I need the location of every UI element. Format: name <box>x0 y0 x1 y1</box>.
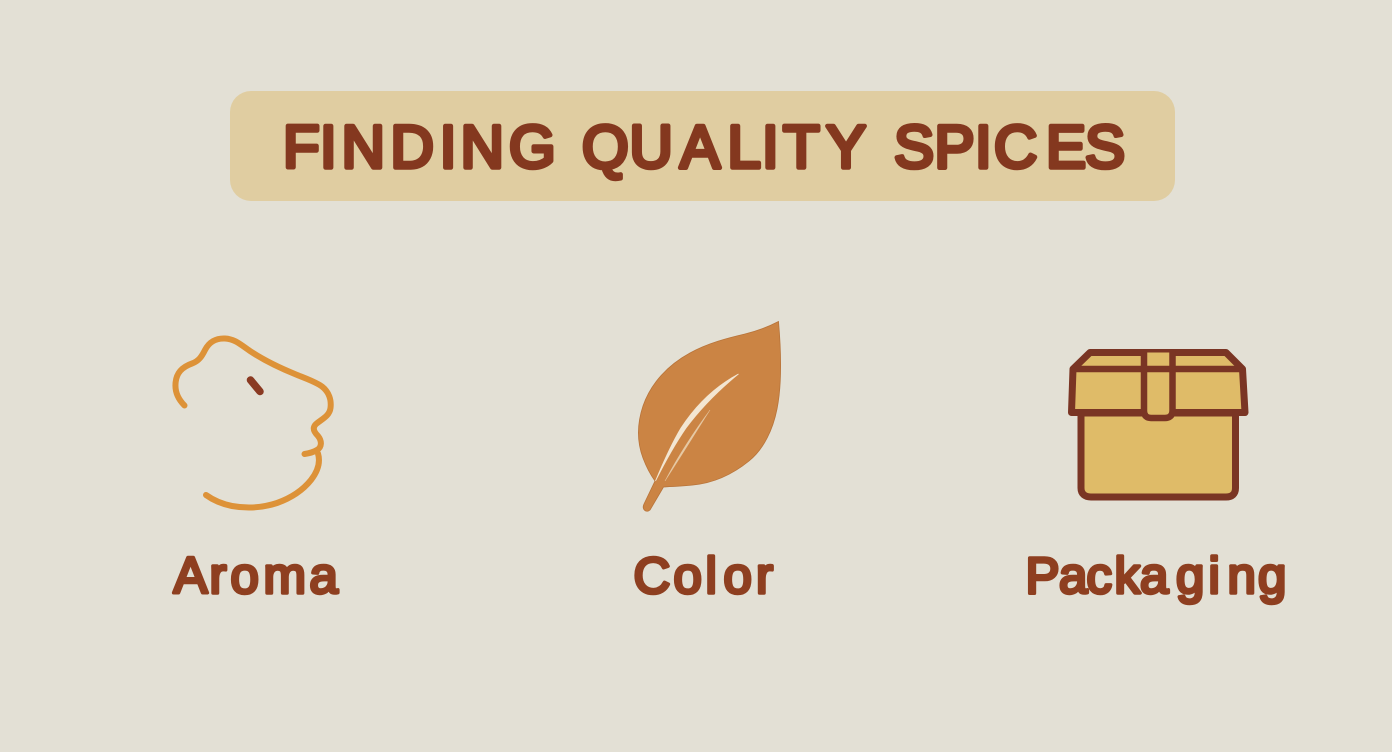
label: Packaging: Packaging <box>1026 547 1286 604</box>
label: Aroma: Aroma <box>174 547 338 604</box>
title: QUALITY <box>582 114 865 180</box>
title: FINDING <box>283 114 556 180</box>
icon: packaging box <box>1072 352 1245 497</box>
box strap <box>1144 352 1172 418</box>
leaf secondary vein <box>665 410 710 481</box>
leaf vein <box>656 374 738 481</box>
label: Color: Color <box>634 547 773 604</box>
icon: color leaf <box>638 322 781 511</box>
icon: aroma eye mark <box>250 380 260 392</box>
lid crease <box>1073 366 1242 372</box>
title banner <box>230 91 1175 201</box>
box body <box>1081 413 1236 497</box>
icon: aroma face profile <box>175 338 331 507</box>
box lid <box>1072 352 1245 412</box>
title: SPICES <box>894 114 1125 180</box>
